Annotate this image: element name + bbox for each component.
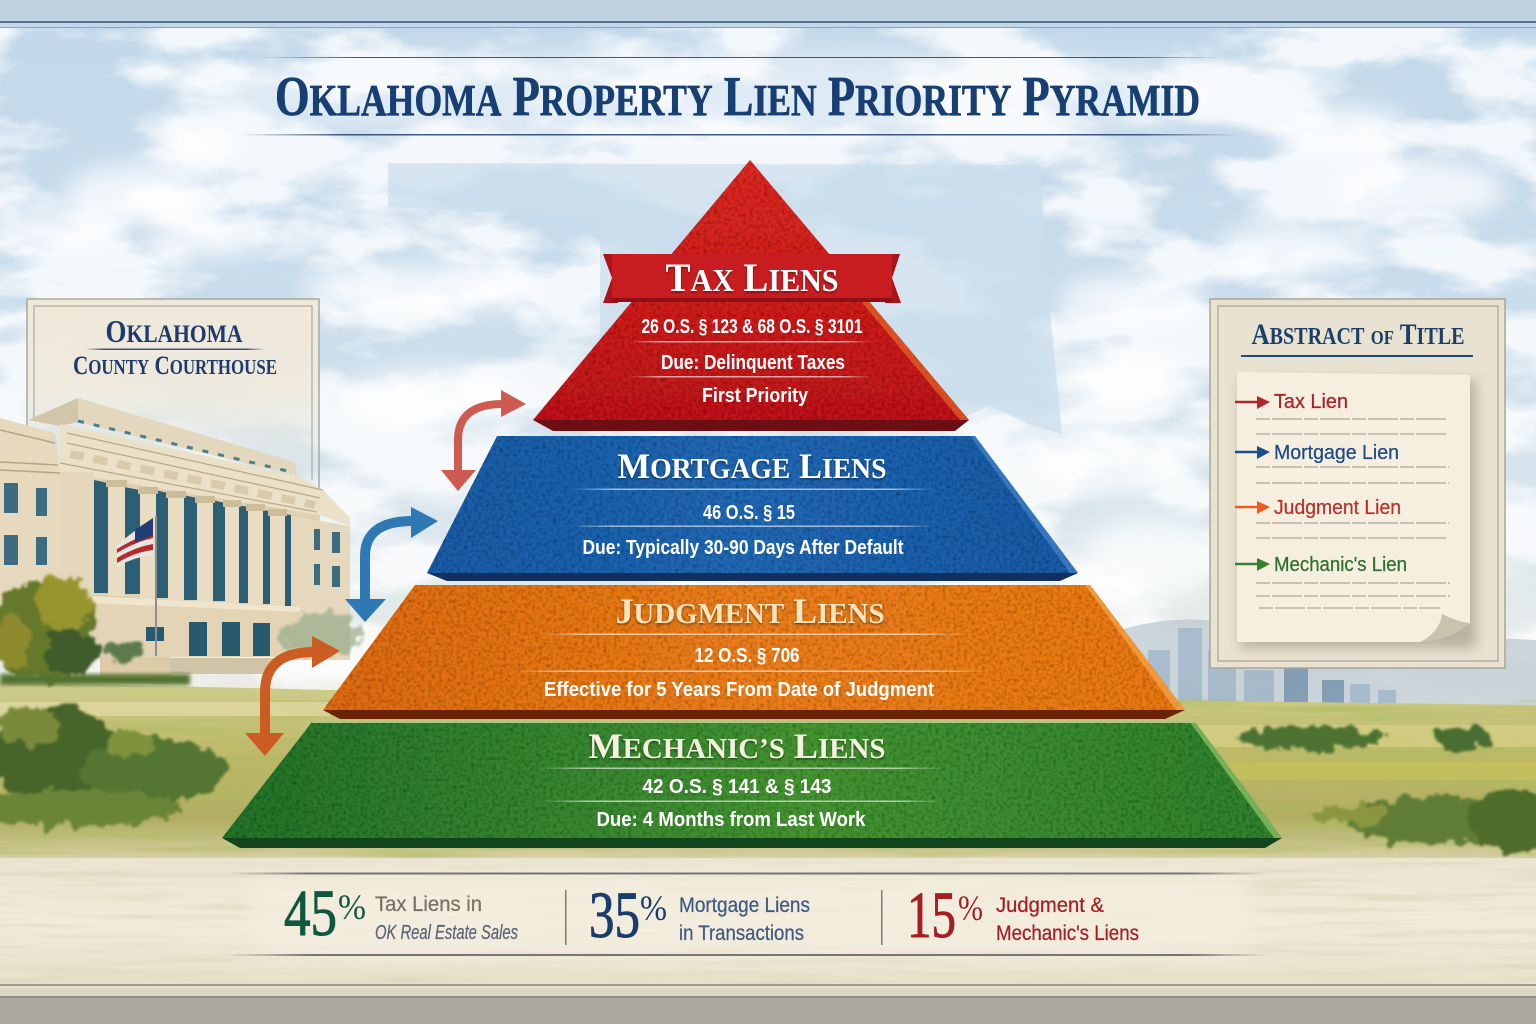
- tier: judgment liens: [323, 585, 1185, 719]
- background: bushes right: [1238, 725, 1536, 852]
- tier: mortgage liens: MORTGAGE LIENS: [618, 446, 886, 486]
- stat: 35%: [589, 879, 810, 952]
- stat: 35%: 35: [589, 879, 640, 952]
- tier: tax liens: 26 O.S. § 123 & 68 O.S. § 3101: [642, 316, 862, 338]
- courthouse building: [0, 398, 350, 676]
- tier: mechanic's liens: [222, 721, 1282, 848]
- tier: judgment liens: Effective for 5 Years From Date of Judgment: [544, 679, 934, 701]
- stat: 35%: %: [640, 888, 667, 928]
- tier: mechanic's liens: Due: 4 Months from Last Work: [596, 809, 866, 831]
- trees by the courthouse: [0, 577, 360, 682]
- courthouse title card: OKLAHOMA: [106, 313, 243, 349]
- list item: tax lien: Tax Lien: [1274, 391, 1348, 413]
- list item: mechanic's lien: Mechanic's Lien: [1274, 554, 1407, 576]
- tier: judgment liens: 12 O.S. § 706: [694, 645, 800, 667]
- list item: judgment lien: Judgment Lien: [1274, 497, 1401, 519]
- panel: courthouse: [0, 299, 360, 685]
- background: distant city skyline: [1120, 620, 1536, 715]
- panel: abstract of title: [1210, 299, 1505, 668]
- arrow: tax to mortgage: [441, 390, 526, 491]
- pyramid: [222, 160, 1282, 848]
- tier: judgment liens: JUDGMENT LIENS: [616, 591, 884, 631]
- footer border band: [0, 984, 1536, 1024]
- tier: mortgage liens: 46 O.S. § 15: [703, 502, 795, 524]
- stat: 45%: OK Real Estate Sales: [375, 922, 518, 944]
- stat: 45%: [284, 877, 518, 950]
- abstract heading: ABSTRACT OF TITLE: [1252, 318, 1464, 351]
- tax liens ribbon banner: [603, 254, 901, 303]
- tax liens ribbon banner: TAX LIENS: [666, 255, 838, 300]
- courthouse title card: [27, 299, 319, 490]
- list item: mortgage lien: Mortgage Lien: [1274, 442, 1399, 464]
- background: faded Oklahoma state outline: [388, 163, 1062, 434]
- stat: 15%: [907, 879, 1139, 952]
- stat: 45%: Tax Liens in: [375, 893, 482, 916]
- stat: 15%: Judgment &: [996, 894, 1104, 917]
- arrow: judgment to mechanic's: [245, 636, 340, 756]
- tier: mechanic's liens: 42 O.S. § 141 & § 143: [642, 776, 832, 798]
- stat: 45%: 45: [284, 877, 337, 950]
- lawn strip: [0, 674, 190, 685]
- list item: tax lien: [1235, 391, 1348, 413]
- title: OKLAHOMA PROPERTY LIEN PRIORITY PYRAMID: [275, 66, 1200, 128]
- background: clouds: [0, 28, 1536, 708]
- arrow: mortgage to judgment: [345, 507, 438, 622]
- flag pole and American flag: [117, 516, 157, 656]
- stat: 15%: %: [958, 888, 983, 928]
- background: bushes left: [0, 705, 227, 826]
- top border band: [0, 0, 1536, 28]
- tier: tax liens: Due: Delinquent Taxes: [661, 352, 845, 374]
- stat: 15%: 15: [907, 879, 956, 952]
- background: sky: [0, 0, 1536, 730]
- tier: tax liens: First Priority: [702, 385, 809, 407]
- stat: 15%: Mechanic's Liens: [996, 922, 1139, 945]
- background: parchment foreground: [0, 858, 1536, 988]
- courthouse title card: COUNTY COURTHOUSE: [73, 351, 277, 380]
- stat: 35%: Mortgage Liens: [679, 894, 810, 917]
- tier: mortgage liens: [427, 436, 1078, 581]
- tier: tax liens: [533, 160, 969, 431]
- stat: 35%: in Transactions: [679, 922, 804, 945]
- paper document: [1237, 372, 1476, 648]
- tier: mechanic's liens: MECHANIC’S LIENS: [588, 726, 885, 766]
- background: meadow and fields: [0, 682, 1536, 865]
- tier: mortgage liens: Due: Typically 30-90 Days After Default: [582, 537, 904, 559]
- stat: 45%: %: [338, 887, 366, 927]
- statistics strip: [225, 872, 1270, 956]
